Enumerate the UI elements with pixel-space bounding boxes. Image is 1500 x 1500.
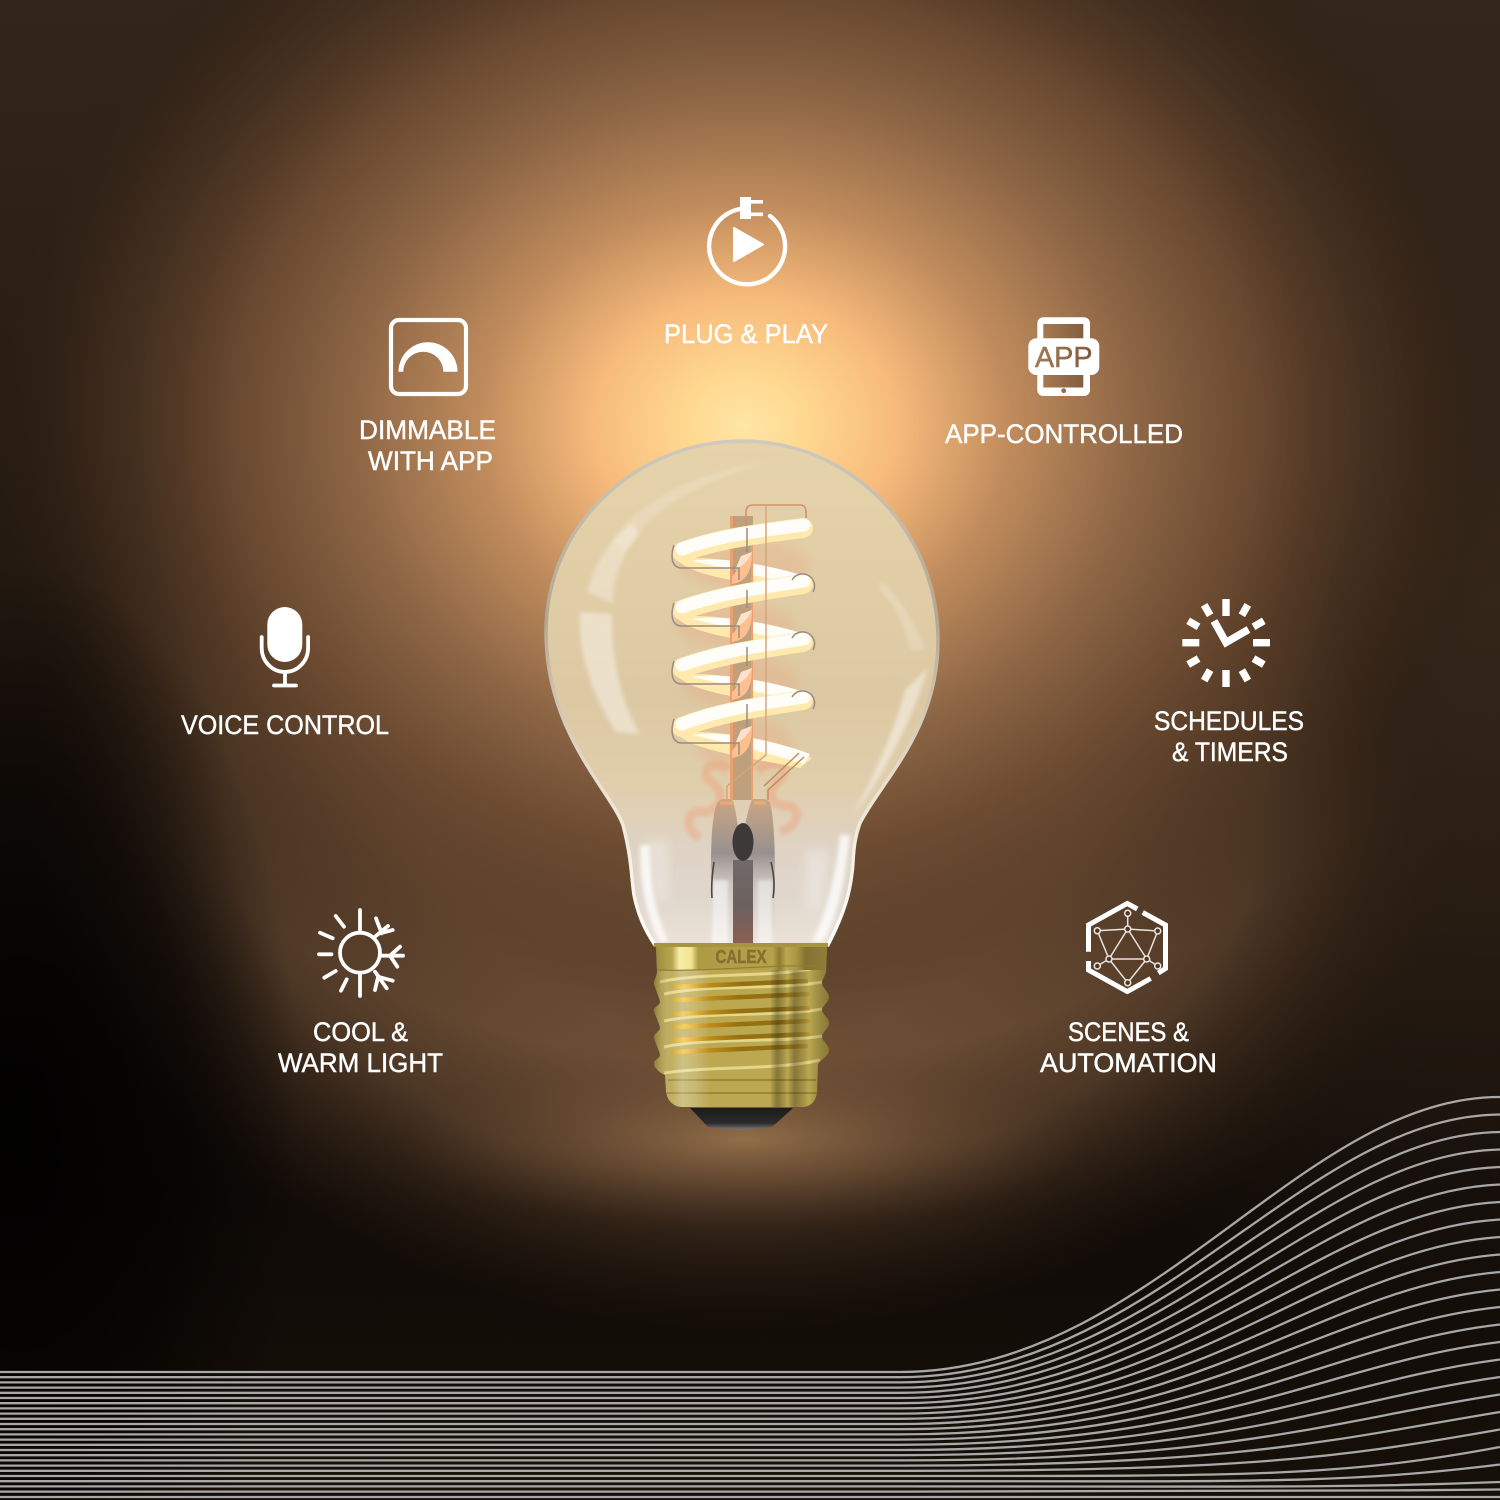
- screw base: [654, 943, 829, 1130]
- icon: microphone: [262, 607, 308, 686]
- label: WITH APP: [368, 446, 493, 476]
- icon: clock: [1182, 599, 1270, 687]
- label: [1040, 1017, 1217, 1078]
- glass envelope: [546, 441, 938, 945]
- brand mark: CALEX: [716, 946, 767, 967]
- glass spine: [730, 516, 753, 800]
- feature: schedules and timers: [1154, 599, 1304, 767]
- icon: sun and snowflake: [319, 910, 403, 996]
- threads: [654, 947, 829, 1107]
- glass reflections: [580, 462, 928, 942]
- label: [278, 1017, 443, 1078]
- label: & TIMERS: [1172, 737, 1288, 767]
- label: WARM LIGHT: [278, 1048, 443, 1078]
- feature: plug and play: [664, 197, 828, 349]
- label: COOL &: [313, 1017, 408, 1047]
- filament reflection: [675, 541, 810, 838]
- filament back strands: [675, 558, 812, 768]
- icon: plug timer: [709, 197, 785, 284]
- label: [1154, 706, 1304, 767]
- stem: [711, 799, 775, 945]
- feature: app-controlled: [945, 317, 1183, 449]
- label: VOICE CONTROL: [181, 710, 389, 740]
- wave line pattern: [0, 1097, 1500, 1497]
- icon: phone with app badge: [1028, 317, 1099, 396]
- collar: [654, 943, 828, 970]
- thread shading: [654, 947, 829, 1107]
- label: APP-CONTROLLED: [945, 419, 1183, 449]
- icon: dimmer dial: [391, 320, 466, 394]
- feature: cool and warm light: [278, 910, 443, 1078]
- grooves and highlights: [660, 968, 822, 1093]
- contact tip: [690, 1108, 793, 1130]
- label: PLUG & PLAY: [664, 319, 828, 349]
- label: SCHEDULES: [1154, 706, 1304, 736]
- label: AUTOMATION: [1040, 1048, 1217, 1078]
- light bulb: [546, 441, 938, 945]
- feature: dimmable with app: [359, 320, 496, 476]
- label: DIMMABLE: [359, 415, 496, 445]
- label: [359, 415, 496, 476]
- icon: hexagon network: [1088, 904, 1166, 992]
- icon: phone with app badge: APP: [1035, 342, 1092, 374]
- feature: voice control: [181, 607, 389, 740]
- label: SCENES &: [1068, 1017, 1189, 1047]
- support wires: [672, 505, 815, 800]
- feature: scenes and automation: [1040, 904, 1217, 1078]
- filament front strands: [682, 525, 804, 727]
